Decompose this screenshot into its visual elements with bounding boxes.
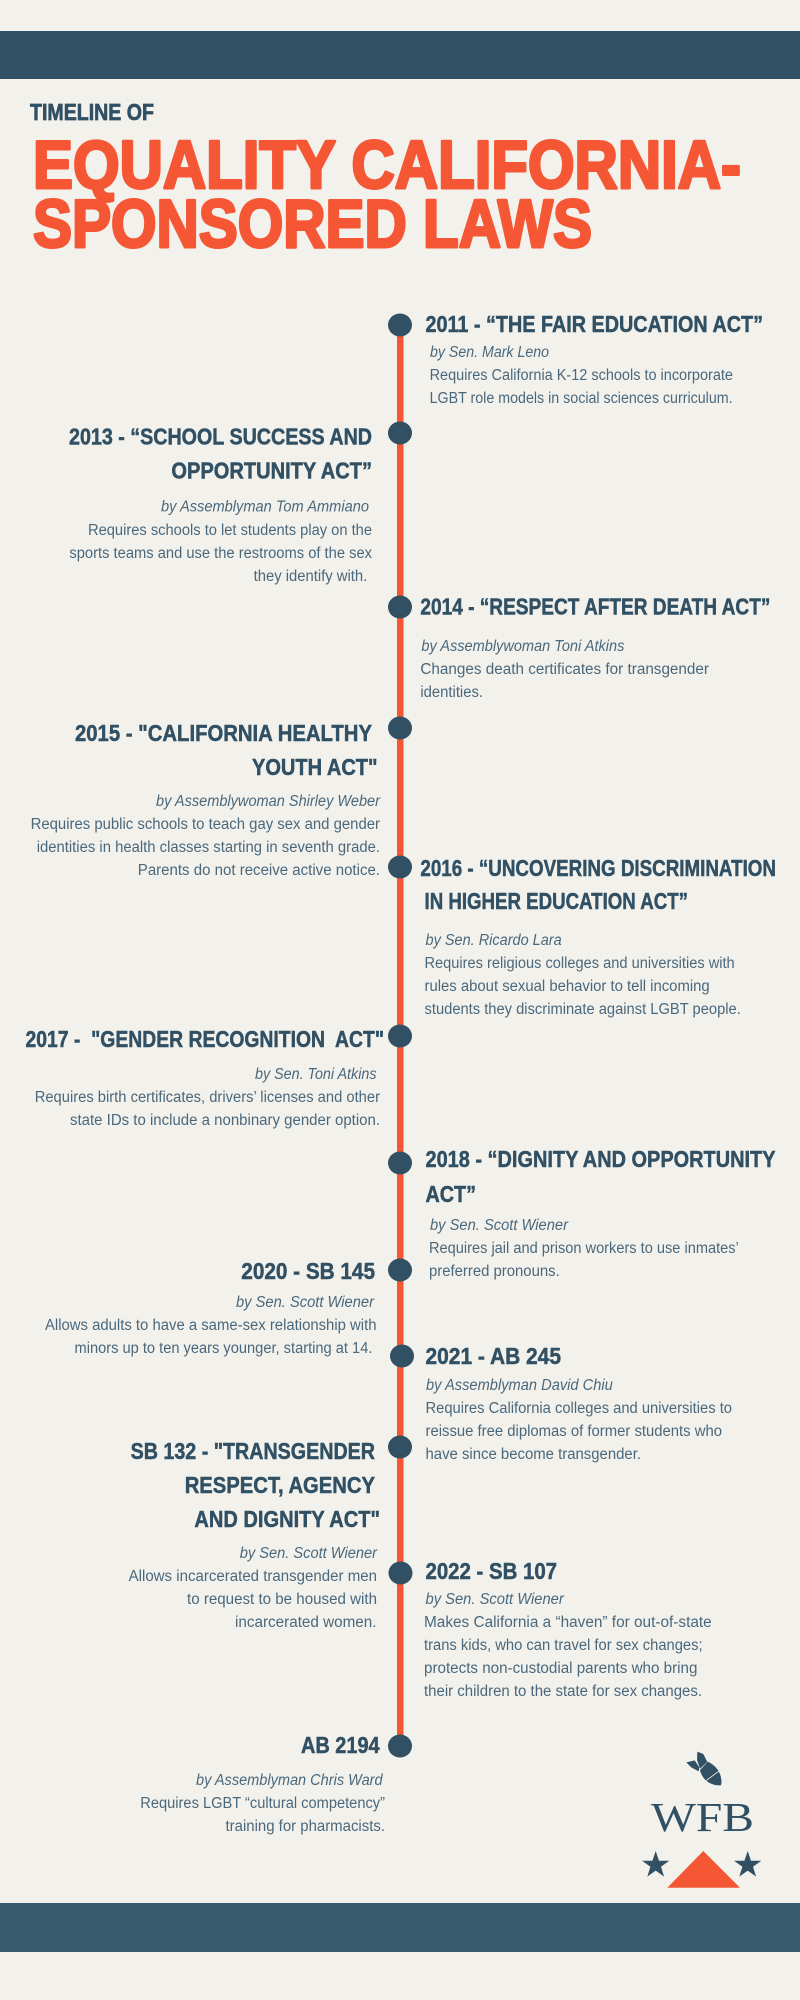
entry: 2011 Fair Education Act: by Sen. Mark Leno	[430, 344, 549, 361]
entry: 2013 School Success and Opportunity Act: OPPORTUNITY ACT”	[171, 458, 372, 484]
entry: 2013 School Success and Opportunity Act: by Assemblyman Tom Ammiano	[161, 499, 369, 516]
entry: 2022 SB 107	[424, 1558, 712, 1700]
entry: 2020 SB 145	[45, 1258, 376, 1357]
footer bar	[0, 1903, 800, 1952]
entry: 2014 Respect After Death Act: identities.	[420, 684, 483, 701]
entry: 2016 Uncovering Discrimination in Higher Education Act: students they discriminate against LGBT people.	[424, 1001, 741, 1018]
icon: left star	[642, 1851, 669, 1877]
entry: SB 132 Transgender Respect, Agency and Dignity Act: incarcerated women.	[235, 1614, 376, 1631]
entry: 2013 School Success and Opportunity Act: sports teams and use the restrooms of the sex	[69, 545, 372, 562]
entry: 2018 Dignity and Opportunity Act: Requires jail and prison workers to use inmates’	[429, 1240, 739, 1257]
entry: SB 132 Transgender Respect, Agency and Dignity Act: RESPECT, AGENCY	[185, 1472, 375, 1498]
entry: 2022 SB 107: their children to the state for sex changes.	[424, 1683, 702, 1700]
entry: AB 2194: Requires LGBT “cultural competency”	[140, 1795, 385, 1812]
entry: 2018 Dignity and Opportunity Act	[426, 1146, 776, 1280]
entry: 2017 Gender Recognition Act: Requires birth certificates, drivers’ licenses and other	[35, 1089, 380, 1106]
entry: AB 2194: AB 2194	[301, 1732, 380, 1758]
entry: 2016 Uncovering Discrimination in Higher Education Act: Requires religious colleges and universities with	[424, 955, 735, 972]
entry: 2017 Gender Recognition Act	[26, 1026, 384, 1129]
entry: 2017 Gender Recognition Act: state IDs to include a nonbinary gender option.	[70, 1112, 380, 1129]
entry: 2015 California Healthy Youth Act: YOUTH ACT"	[252, 754, 378, 780]
title line 2: SPONSORED LAWS	[33, 186, 592, 262]
entry: 2016 Uncovering Discrimination in Higher Education Act	[420, 855, 776, 1018]
entry: 2022 SB 107: protects non-custodial parents who bring	[424, 1660, 697, 1677]
entry: SB 132 Transgender Respect, Agency and Dignity Act: to request to be housed with	[187, 1591, 377, 1608]
WFB logo	[642, 1752, 761, 1888]
title	[30, 99, 741, 262]
header bar	[0, 31, 800, 79]
entry: 2013 School Success and Opportunity Act: Requires schools to let students play on the	[88, 522, 372, 539]
entry: 2014 Respect After Death Act: by Assemblywoman Toni Atkins	[421, 638, 625, 655]
entry: 2020 SB 145: Allows adults to have a same-sex relationship with	[45, 1317, 376, 1334]
entry: 2021 AB 245: 2021 - AB 245	[426, 1343, 561, 1369]
entry: SB 132 Transgender Respect, Agency and Dignity Act	[129, 1438, 380, 1631]
entry: 2021 AB 245	[426, 1343, 732, 1463]
entry: 2015 California Healthy Youth Act: 2015 - "CALIFORNIA HEALTHY	[75, 720, 372, 746]
entry: 2013 School Success and Opportunity Act	[69, 424, 372, 585]
entry: 2011 Fair Education Act	[426, 311, 763, 407]
entry: 2021 AB 245: by Assemblyman David Chiu	[426, 1377, 613, 1394]
wordmark: WFB	[651, 1794, 754, 1840]
entry: 2018 Dignity and Opportunity Act: ACT”	[426, 1181, 476, 1207]
entry: SB 132 Transgender Respect, Agency and Dignity Act: by Sen. Scott Wiener	[240, 1545, 378, 1562]
entry: 2018 Dignity and Opportunity Act: by Sen. Scott Wiener	[430, 1217, 569, 1234]
entry: 2021 AB 245: reissue free diplomas of former students who	[426, 1423, 722, 1440]
entry: 2013 School Success and Opportunity Act: they identify with.	[254, 568, 367, 585]
entry: 2015 California Healthy Youth Act: by Assemblywoman Shirley Weber	[156, 793, 381, 810]
entry: 2022 SB 107: trans kids, who can travel for sex changes;	[424, 1637, 703, 1654]
entry: 2015 California Healthy Youth Act: Requires public schools to teach gay sex and gender	[31, 816, 380, 833]
entry: AB 2194: training for pharmacists.	[226, 1818, 385, 1835]
entry: SB 132 Transgender Respect, Agency and Dignity Act: AND DIGNITY ACT"	[194, 1506, 380, 1532]
entry: 2015 California Healthy Youth Act: identities in health classes starting in seventh grade.	[37, 839, 380, 856]
timeline spine	[388, 314, 414, 1758]
entry: 2016 Uncovering Discrimination in Higher Education Act: IN HIGHER EDUCATION ACT”	[424, 888, 688, 914]
entry: 2020 SB 145: by Sen. Scott Wiener	[236, 1294, 375, 1311]
entry: 2013 School Success and Opportunity Act: 2013 - “SCHOOL SUCCESS AND	[69, 424, 372, 450]
eyebrow: timeline of: TIMELINE OF	[30, 99, 154, 125]
entry: 2021 AB 245: Requires California colleges and universities to	[426, 1400, 732, 1417]
entry: 2020 SB 145: minors up to ten years younger, starting at 14.	[74, 1340, 372, 1357]
entry: 2016 Uncovering Discrimination in Higher Education Act: by Sen. Ricardo Lara	[426, 932, 562, 949]
entry: 2018 Dignity and Opportunity Act: preferred pronouns.	[429, 1263, 560, 1280]
entry: 2011 Fair Education Act: Requires California K-12 schools to incorporate	[430, 367, 733, 384]
entry: 2021 AB 245: have since become transgender.	[426, 1446, 641, 1463]
entry: 2015 California Healthy Youth Act: Parents do not receive active notice.	[138, 862, 380, 879]
entry: 2011 Fair Education Act: LGBT role models in social sciences curriculum.	[430, 390, 733, 407]
entry: 2017 Gender Recognition Act: by Sen. Toni Atkins	[255, 1066, 377, 1083]
entry: 2022 SB 107: by Sen. Scott Wiener	[426, 1591, 565, 1608]
entry: 2022 SB 107: 2022 - SB 107	[426, 1558, 557, 1584]
entry: 2014 Respect After Death Act	[420, 594, 770, 701]
entry: SB 132 Transgender Respect, Agency and Dignity Act: Allows incarcerated transgender men	[129, 1568, 377, 1585]
icon: bomb	[686, 1752, 722, 1785]
entry: SB 132 Transgender Respect, Agency and Dignity Act: SB 132 - "TRANSGENDER	[131, 1438, 375, 1464]
entry: AB 2194: by Assemblyman Chris Ward	[196, 1772, 384, 1789]
entry: 2020 SB 145: 2020 - SB 145	[241, 1258, 375, 1284]
entry: 2017 Gender Recognition Act: 2017 - "GENDER RECOGNITION ACT"	[26, 1026, 384, 1052]
icon: right star	[734, 1851, 761, 1877]
icon: orange triangle	[667, 1851, 740, 1888]
entry: 2022 SB 107: Makes California a “haven” for out-of-state	[424, 1614, 712, 1631]
entry: AB 2194	[140, 1732, 385, 1835]
entry: 2015 California Healthy Youth Act	[31, 720, 381, 879]
entry: 2014 Respect After Death Act: Changes death certificates for transgender	[420, 661, 709, 678]
entry: 2016 Uncovering Discrimination in Higher Education Act: rules about sexual behavior to tell incoming	[424, 978, 710, 995]
